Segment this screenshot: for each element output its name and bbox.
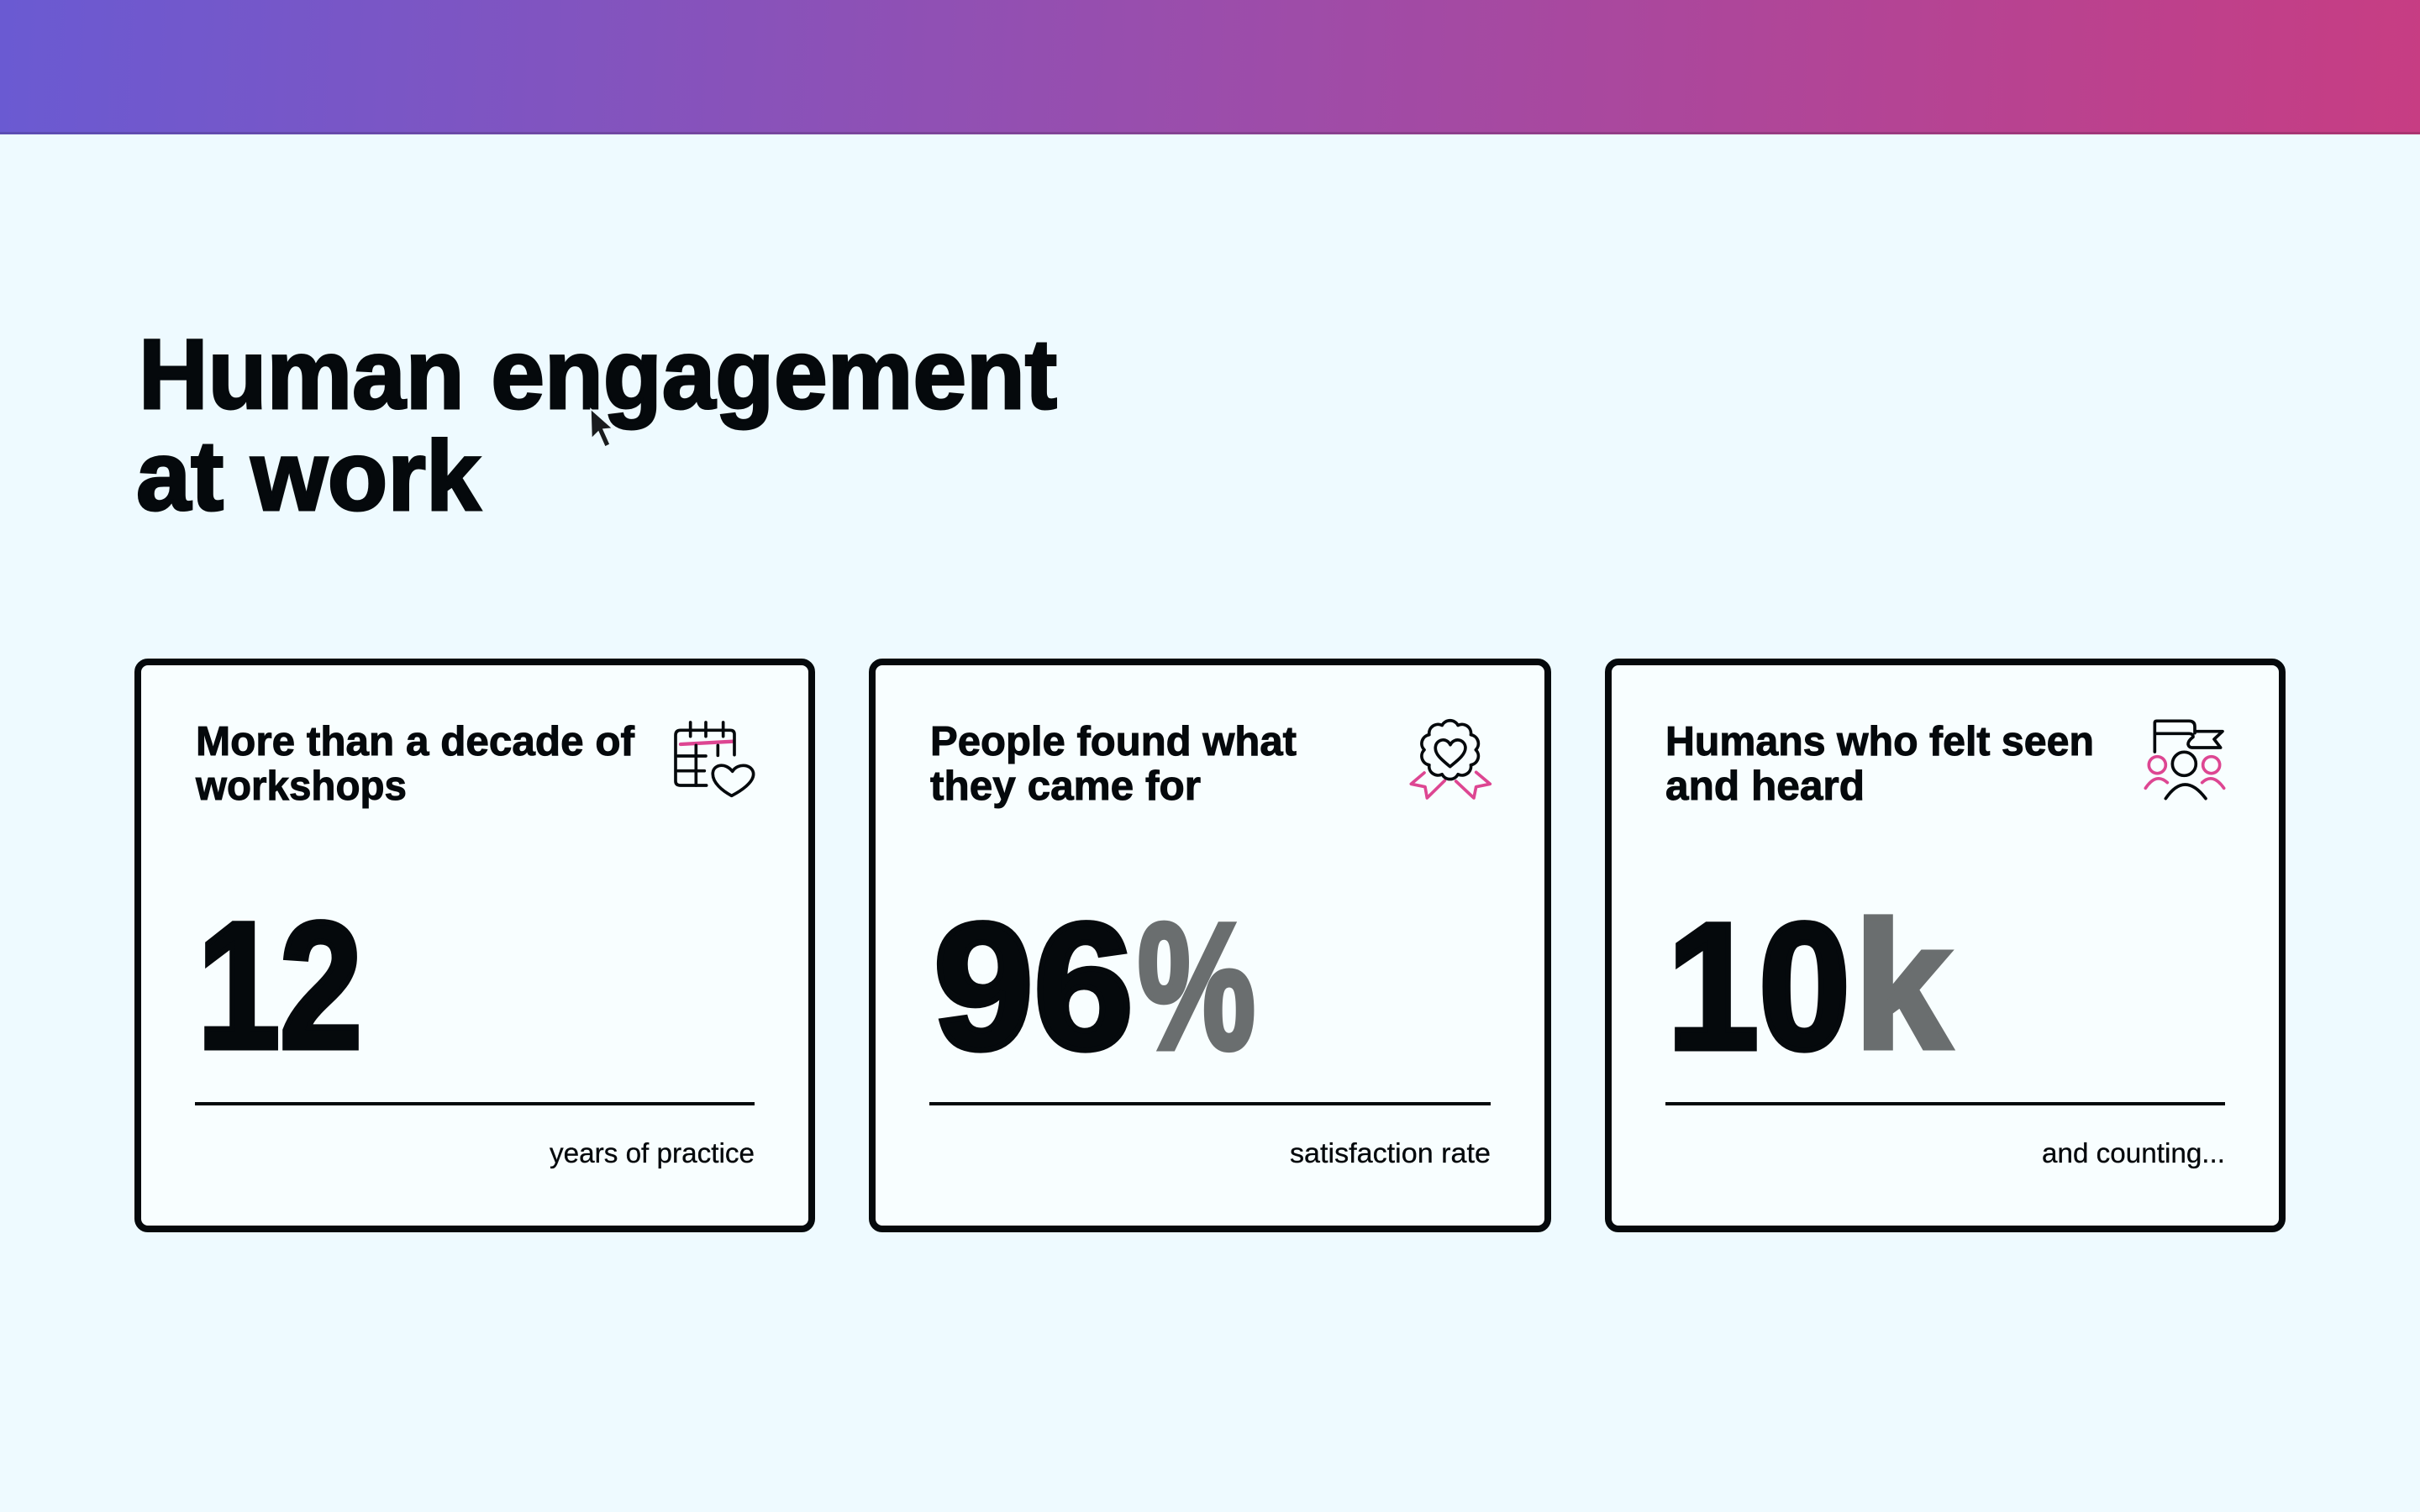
- title: [136, 319, 1057, 532]
- title: Human engagement: [139, 319, 1057, 430]
- gradient header band: [0, 0, 2420, 134]
- big number: 96: 96: [934, 886, 1134, 1087]
- caption: satisfaction rate: satisfaction rate: [1290, 1137, 1491, 1168]
- card heading: workshops: More than a decade of: [196, 719, 635, 764]
- icon: people with flag: [2145, 721, 2224, 799]
- divider rule: [929, 1102, 1491, 1105]
- card heading: workshops: workshops: [195, 764, 407, 809]
- big number: 10: 10: [1667, 886, 1850, 1087]
- mouse cursor: [591, 409, 613, 447]
- card heading: humans: and heard: [1665, 764, 1865, 809]
- caption: years of practice: years of practice: [550, 1137, 755, 1168]
- card heading: satisfaction: [930, 719, 1297, 809]
- card heading: workshops: [195, 719, 635, 809]
- percent sign: %: [1138, 886, 1255, 1087]
- icon: award rosette with heart: [1411, 721, 1490, 798]
- panel: satisfaction: [872, 662, 1548, 1229]
- k suffix: k: [1854, 885, 1951, 1086]
- divider rule: [1665, 1102, 2225, 1105]
- big number: 12: 12: [197, 885, 362, 1086]
- divider rule: [195, 1102, 755, 1105]
- title: at work: [136, 421, 481, 532]
- panel: workshops: [138, 662, 812, 1229]
- card heading: humans: [1665, 719, 2094, 809]
- panel: humans: [1608, 662, 2282, 1229]
- card heading: satisfaction: they came for: [930, 764, 1201, 809]
- card heading: satisfaction: People found what: [930, 719, 1297, 764]
- caption: and counting: and counting...: [2042, 1137, 2225, 1168]
- card heading: humans: Humans who felt seen: [1665, 719, 2094, 764]
- icon: calendar with heart: [676, 722, 754, 795]
